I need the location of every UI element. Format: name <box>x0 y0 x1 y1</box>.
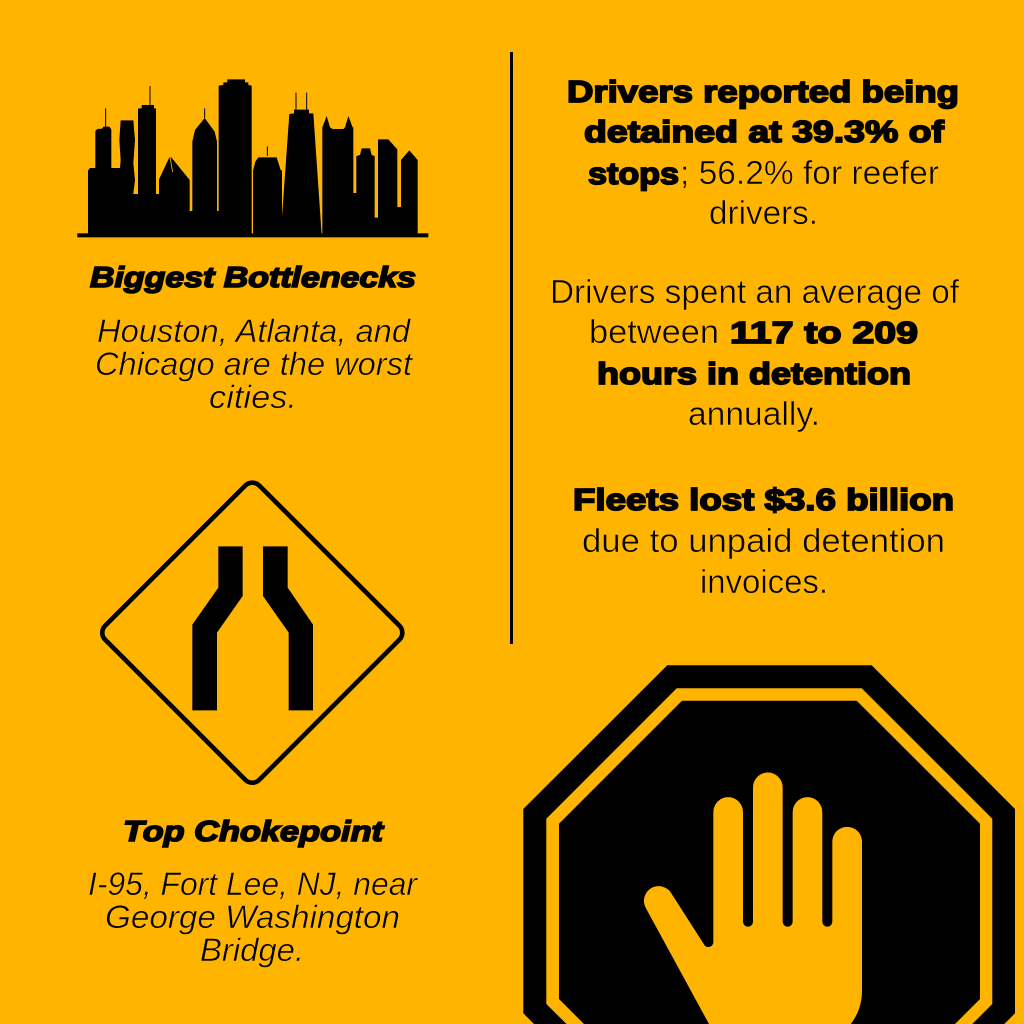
text: fleet losses: Fleets lost $3.6 billion <box>573 482 954 517</box>
icon: road narrows sign <box>98 479 406 787</box>
text: fleet losses <box>573 482 954 600</box>
text: chokepoint location: Bridge. <box>200 932 304 968</box>
text: hours in detention: 117 to 209 <box>730 315 918 350</box>
text: hours in detention: annually. <box>688 395 820 432</box>
heading: Biggest Bottlenecks: Biggest Bottlenecks <box>90 262 416 294</box>
text: detained at stops: detained at 39.3% of <box>584 114 945 149</box>
text: worst cities: cities. <box>209 379 297 415</box>
heading: Top Chokepoint: Top Chokepoint <box>123 816 385 848</box>
text: hours in detention: between <box>589 313 719 350</box>
text: hours in detention: hours in detention <box>597 356 911 391</box>
text: worst cities: Chicago are the worst <box>95 346 413 382</box>
text: chokepoint location <box>88 866 418 968</box>
text: detained at stops: ; 56.2% for reefer <box>680 154 939 191</box>
text: detained at stops: stops <box>588 156 679 191</box>
text: chokepoint location: I-95, Fort Lee, NJ, near <box>88 866 418 902</box>
text: hours in detention <box>550 273 960 432</box>
text: worst cities <box>95 313 413 415</box>
icon: city skyline <box>77 79 428 237</box>
text: detained at stops: Drivers reported being <box>567 74 959 109</box>
icon: stop sign with hand <box>523 665 1015 1024</box>
text: chokepoint location: George Washington <box>105 899 400 935</box>
text: fleet losses: due to unpaid detention <box>582 522 945 559</box>
text: worst cities: Houston, Atlanta, and <box>97 313 411 349</box>
text: fleet losses: invoices. <box>700 563 828 600</box>
text: hours in detention: Drivers spent an average of <box>550 273 960 310</box>
text: detained at stops: drivers. <box>709 194 818 231</box>
text: detained at stops <box>567 74 959 231</box>
